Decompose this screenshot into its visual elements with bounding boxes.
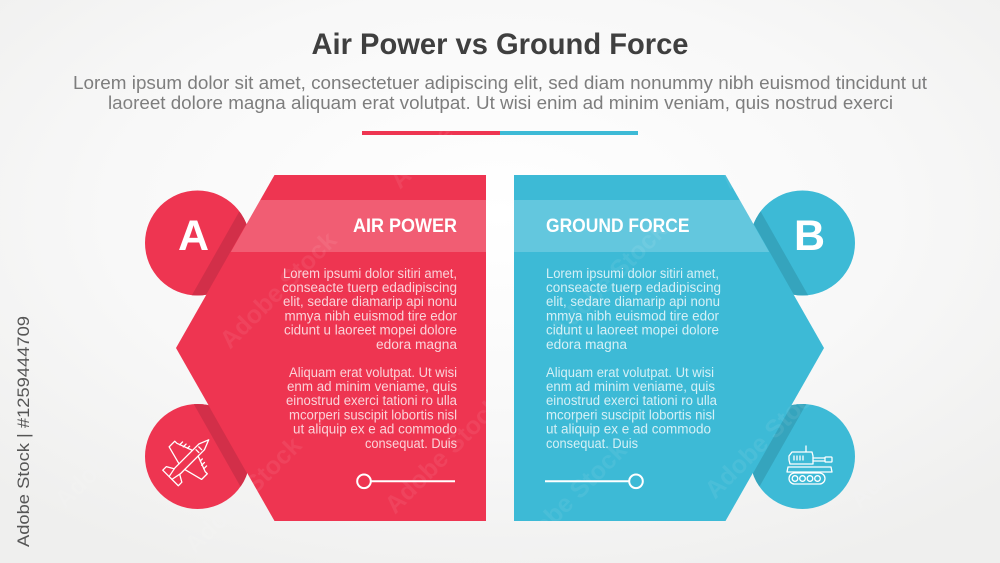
body text: second paragraph: mcorperi suscipit lobortis nisl (289, 408, 457, 422)
body text: first paragraph: cidunt u laoreet mopei dolore (284, 322, 457, 338)
circle badge A (145, 190, 246, 296)
body text: second paragraph: ut aliquip ex e ad commodo (293, 422, 457, 436)
circle badge A: A (178, 212, 209, 260)
body text: first paragraph: conseacte tuerp edadipiscing (546, 280, 721, 295)
body text: first paragraph: conseacte tuerp edadipiscing (282, 280, 457, 295)
body text: first paragraph: cidunt u laoreet mopei dolore (546, 322, 719, 338)
slider marker (357, 474, 455, 488)
hexagon panel shape (176, 175, 486, 521)
stock watermarks: Adobe Stock (504, 436, 632, 563)
panel: ground force (514, 175, 824, 521)
stock watermarks: Adobe Stock (544, 216, 672, 344)
stock watermarks: Adobe Stock (179, 431, 307, 559)
heading band (514, 200, 769, 252)
stock watermarks: Adobe Stock (24, 246, 152, 374)
stock watermarks: Adobe Stock (214, 226, 342, 354)
stock watermarks: Adobe Stock (714, 66, 842, 194)
title: Air Power vs Ground Force (312, 28, 688, 61)
stock watermarks: Adobe Stock (379, 391, 507, 519)
panel: air power (176, 175, 486, 521)
body text: second paragraph: consequat. Duis (546, 436, 638, 451)
subtitle text: laoreet dolore magna aliquam erat volutpat. Ut wisi enim ad minim veniam, quis nostrud exerci (108, 93, 893, 113)
circle icon: tank (752, 404, 855, 509)
stock watermarks: Adobe Stock (49, 386, 177, 514)
body text: first paragraph: Lorem ipsumi dolor sitiri amet, (283, 266, 457, 281)
body text: second paragraph: einostrud exerci tationi ro ulla (546, 393, 717, 408)
body text: second paragraph (286, 365, 457, 451)
circle badge B (754, 190, 855, 296)
body text: second paragraph: einostrud exerci tationi ro ulla (286, 393, 457, 408)
stock watermarks: Adobe Stock (44, 56, 172, 184)
heading: ground force: GROUND FORCE (546, 216, 690, 237)
body text: second paragraph (546, 365, 717, 451)
body text: second paragraph: enm ad minim veniame, quis (287, 379, 457, 394)
title divider bar (362, 131, 638, 135)
circle icon: fighter jet (145, 404, 248, 509)
slider marker (545, 474, 643, 488)
body text: first paragraph (282, 266, 457, 352)
body text: first paragraph: edora magna (546, 337, 627, 352)
body text: second paragraph: Aliquam erat volutpat. Ut wisi (546, 365, 714, 380)
circle badge B: B (794, 212, 825, 260)
hexagon panel shape (514, 175, 824, 521)
body text: first paragraph (546, 266, 721, 352)
stock watermarks: Adobe Stock (384, 66, 512, 194)
heading band (231, 200, 486, 252)
body text: first paragraph: elit, sedare diamarip api nonu (283, 294, 457, 309)
subtitle text (73, 73, 927, 113)
heading: air power: AIR POWER (353, 216, 457, 237)
body text: first paragraph: Lorem ipsumi dolor sitiri amet, (546, 266, 719, 281)
body text: second paragraph: consequat. Duis (365, 436, 457, 451)
body text: second paragraph: enm ad minim veniame, quis (546, 379, 715, 394)
body text: first paragraph: mmya nibh euismod tire edor (546, 308, 719, 324)
body text: second paragraph: mcorperi suscipit lobortis nisl (546, 408, 715, 422)
body text: first paragraph: edora magna (376, 337, 457, 352)
stock id side label: Adobe Stock | #1259444709 (14, 316, 33, 547)
stock watermarks: Adobe Stock (844, 386, 972, 514)
body text: first paragraph: elit, sedare diamarip api nonu (546, 294, 720, 309)
body text: first paragraph: mmya nibh euismod tire edor (284, 308, 457, 324)
body text: second paragraph: ut aliquip ex e ad commodo (546, 422, 711, 436)
subtitle text: Lorem ipsum dolor sit amet, consectetuer adipiscing elit, sed diam nonummy nibh euismod tincidunt ut (73, 73, 927, 93)
body text: second paragraph: Aliquam erat volutpat. Ut wisi (289, 365, 457, 380)
stock watermarks: Adobe Stock (699, 376, 827, 504)
